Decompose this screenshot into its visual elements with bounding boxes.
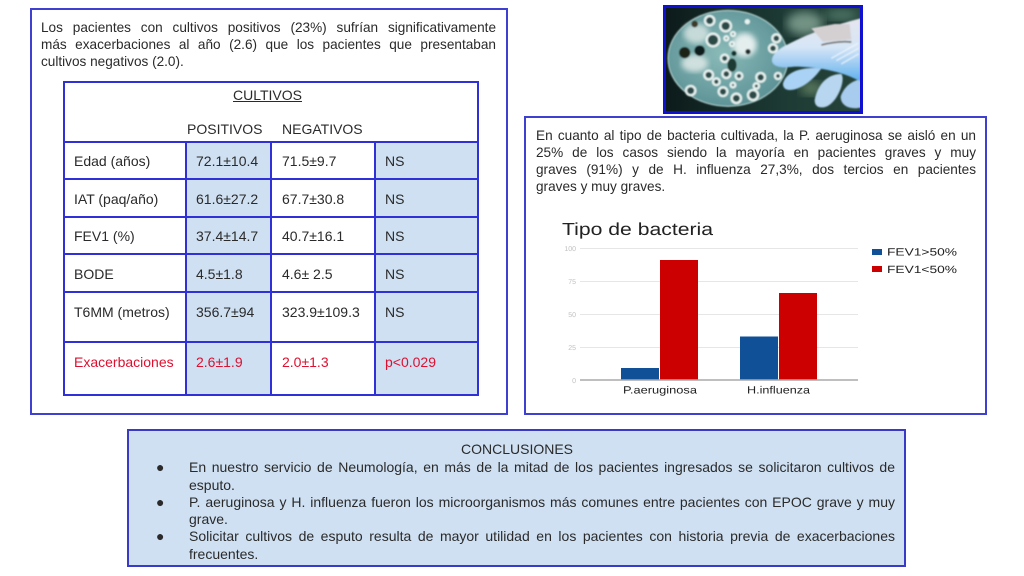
text block: intro cultivos: cultivos negativos (2.0).	[41, 54, 184, 69]
table: cultivos: 71.5±9.7	[282, 153, 336, 169]
text block: intro cultivos: Los pacientes con cultivos positivos (23%) sufrían significativamente	[41, 20, 496, 35]
text block: conclusiones: frecuentes.	[189, 546, 258, 562]
table: cultivos: FEV1 (%)	[74, 228, 135, 244]
chart: tipo de bacteria: 50	[568, 312, 576, 319]
table: cultivos: Exacerbaciones	[74, 354, 174, 370]
table: cultivos: 37.4±14.7	[196, 228, 258, 244]
table: cultivos: 72.1±10.4	[196, 153, 258, 169]
bars	[621, 260, 817, 380]
table: cultivos: NS	[385, 304, 404, 320]
table: cultivos: BODE	[74, 266, 114, 282]
gloved hand	[815, 74, 843, 107]
text block: conclusiones: esputo.	[189, 477, 235, 493]
legend	[872, 246, 957, 276]
text block: conclusiones: En nuestro servicio de Neumología, en más de la mitad de los pacientes ingresados se solicitaron cultivos de	[189, 459, 895, 475]
text block: conclusiones: ●	[156, 494, 164, 510]
text block: conclusiones: Solicitar cultivos de esputo resulta de mayor utilidad en los pacientes con historia previa de exacerbaciones	[189, 528, 895, 544]
text block: tipo de bacteria: En cuanto al tipo de bacteria cultivada, la P. aeruginosa se aisló en un	[536, 128, 976, 143]
table: cultivos: T6MM (metros)	[74, 304, 170, 320]
chart: tipo de bacteria	[562, 219, 957, 396]
text block: conclusiones: ●	[156, 459, 164, 475]
table: cultivos: CULTIVOS	[233, 87, 302, 103]
table: cultivos: POSITIVOS	[187, 121, 262, 137]
table: cultivos	[63, 81, 479, 396]
text block: conclusiones	[156, 441, 895, 562]
panel: conclusiones	[127, 429, 906, 567]
legend: FEV1>50%	[887, 246, 957, 258]
table: cultivos: 356.7±94	[196, 304, 254, 320]
table: cultivos: 2.0±1.3	[282, 354, 329, 370]
text block: conclusiones: P. aeruginosa y H. influenza fueron los microorganismos más comunes entre pacientes con EPOC grave y muy	[189, 494, 895, 510]
table: cultivos: p<0.029	[385, 354, 436, 370]
text block: tipo de bacteria: graves y muy graves.	[536, 179, 665, 194]
table: cultivos: 323.9±109.3	[282, 304, 360, 320]
chart: tipo de bacteria: 100	[564, 246, 576, 253]
chart title: Tipo de bacteria	[562, 219, 713, 239]
text block: tipo de bacteria: 25% de los casos siendo la mayoría en pacientes graves y muy	[536, 145, 976, 160]
text block: intro cultivos	[41, 20, 496, 69]
background bokeh	[786, 12, 823, 35]
text block: conclusiones: ●	[156, 528, 164, 544]
text block: conclusiones: CONCLUSIONES	[461, 441, 573, 457]
axis labels: H.influenza	[747, 384, 810, 396]
chart: tipo de bacteria: 0	[572, 378, 576, 385]
table: cultivos: NS	[385, 228, 404, 244]
axis labels	[623, 384, 810, 396]
table: cultivos: 61.6±27.2	[196, 191, 258, 207]
image: petri dish with gloved hand	[663, 5, 863, 114]
panel: tipo de bacteria	[524, 116, 987, 415]
chart: tipo de bacteria: 75	[568, 279, 576, 286]
table: cultivos: 4.6± 2.5	[282, 266, 332, 282]
table: cultivos: NEGATIVOS	[282, 121, 363, 137]
table: cultivos: 67.7±30.8	[282, 191, 344, 207]
table: cultivos: NS	[385, 191, 404, 207]
table: cultivos: Edad (años)	[74, 153, 150, 169]
table: cultivos: NS	[385, 153, 404, 169]
axis labels: P.aeruginosa	[623, 384, 697, 396]
panel: cultivos	[30, 8, 508, 415]
text block: conclusiones: grave.	[189, 511, 228, 527]
table: cultivos: IAT (paq/año)	[74, 191, 158, 207]
legend: FEV1<50%	[887, 264, 957, 276]
table: cultivos: 2.6±1.9	[196, 354, 243, 370]
text block: intro cultivos: más exacerbaciones al año (2.6) que los pacientes que presentaban	[41, 37, 496, 52]
chart: tipo de bacteria: 25	[568, 345, 576, 352]
table: cultivos: NS	[385, 266, 404, 282]
table: cultivos: 40.7±16.1	[282, 228, 344, 244]
table: cultivos: 4.5±1.8	[196, 266, 243, 282]
text block: tipo de bacteria: graves (91%) y de H. influenza 27,3%, dos tercios en pacientes	[536, 162, 976, 177]
text block: tipo de bacteria	[536, 128, 976, 194]
